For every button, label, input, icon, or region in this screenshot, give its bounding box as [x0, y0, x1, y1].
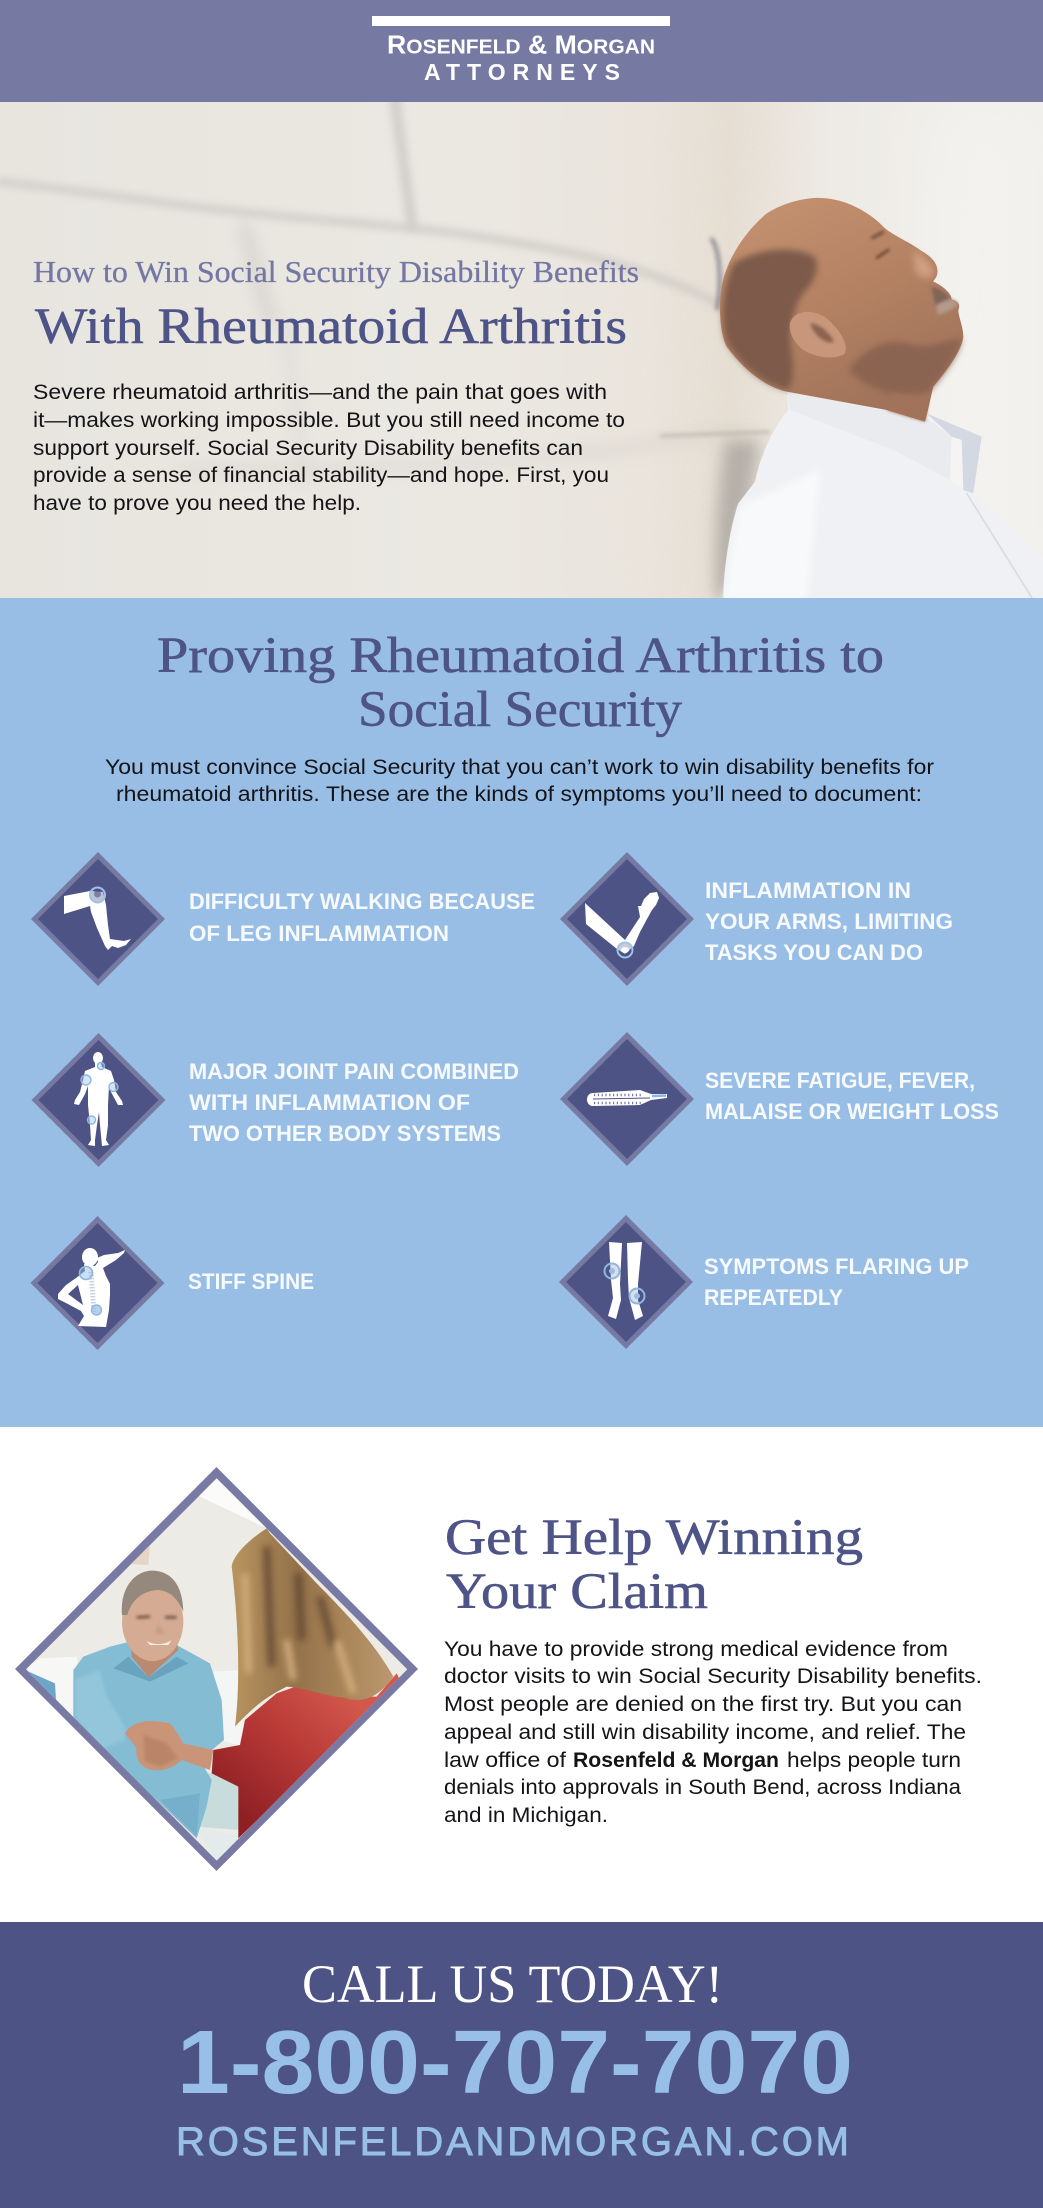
symptom: inflammation in arms: TASKS YOU CAN DO [705, 940, 923, 965]
intro paragraph: have to prove you need the help. [33, 492, 361, 515]
paragraph: medical evidence: Rosenfeld & Morgan [573, 1749, 779, 1772]
subtitle: How to Win: How to Win Social Security Disability Benefits [33, 254, 639, 289]
symptom: major joint pain [189, 1059, 519, 1146]
logo: Rosenfeld & Morgan Attorneys: ROSENFELD & MORGAN [387, 30, 655, 60]
icon: body [32, 1033, 166, 1167]
section intro text: You must convince Social Security that you can’t work to win disability benefits for [105, 756, 934, 779]
icon: arm [560, 852, 694, 986]
paragraph: medical evidence [444, 1638, 982, 1827]
symptom: fatigue [705, 1068, 999, 1124]
symptom: fatigue: SEVERE FATIGUE, FEVER, [705, 1068, 975, 1093]
intro paragraph: it—makes working impossible. But you still need income to [33, 409, 625, 432]
man's shirt [73, 1642, 224, 1838]
symptom: flaring up [704, 1254, 969, 1310]
panel: hero [0, 100, 1043, 600]
paragraph: medical evidence: appeal and still win disability income, and relief. The [444, 1721, 966, 1744]
heading: Proving Rheumatoid Arthritis to Social Security [157, 628, 884, 738]
intro paragraph: provide a sense of financial stability—and hope. First, you [33, 464, 609, 487]
panel: call to action [0, 1922, 1043, 2208]
clasped hands [125, 1721, 213, 1770]
man's head [720, 198, 963, 422]
symptom: inflammation in arms [705, 878, 953, 965]
paragraph: medical evidence: Most people are denied on the first try. But you can [444, 1693, 962, 1716]
intro paragraph: support yourself. Social Security Disability benefits can [33, 437, 583, 460]
logo: Rosenfeld & Morgan Attorneys [372, 16, 670, 85]
symptom: stiff spine: STIFF SPINE [188, 1269, 314, 1294]
icon: spine [30, 1216, 164, 1350]
symptom: difficulty walking: DIFFICULTY WALKING BECAUSE [189, 889, 535, 914]
symptom: major joint pain: TWO OTHER BODY SYSTEMS [189, 1121, 501, 1146]
blurred stone wall [0, 100, 1043, 598]
panel: proving symptoms [0, 598, 1043, 1427]
panel: get help [15, 1467, 980, 1871]
icon: thermometer [560, 1032, 694, 1166]
symptom: flaring up: REPEATEDLY [704, 1285, 843, 1310]
paragraph: medical evidence: and in Michigan. [444, 1804, 608, 1827]
paragraph: medical evidence: You have to provide strong medical evidence from [444, 1638, 948, 1661]
heading: Get Help Winning Your Claim: Your Claim [446, 1564, 708, 1620]
man's head [131, 1644, 178, 1678]
paragraph: medical evidence: denials into approvals in South Bend, across Indiana [444, 1776, 961, 1799]
symptom: flaring up: SYMPTOMS FLARING UP [704, 1254, 969, 1279]
title: With Rheumatoid Arthritis: With Rheumatoid Arthritis [35, 299, 627, 355]
symptom: inflammation in arms: INFLAMMATION IN [705, 878, 911, 903]
heading: Get Help Winning Your Claim [445, 1510, 863, 1620]
symptom: fatigue: MALAISE OR WEIGHT LOSS [705, 1099, 999, 1124]
website: ROSENFELDANDMORGAN.COM [176, 2120, 849, 2164]
section intro text: rheumatoid arthritis. These are the kinds of symptoms you’ll need to document: [116, 783, 922, 806]
heading: Proving Rheumatoid Arthritis to Social Security: Proving Rheumatoid Arthritis to [157, 628, 884, 684]
heading: Get Help Winning Your Claim: Get Help Winning [445, 1510, 863, 1566]
symptom: major joint pain: MAJOR JOINT PAIN COMBINED [189, 1059, 519, 1084]
icon: legs [559, 1215, 693, 1349]
section intro text [105, 756, 934, 806]
panel: header [0, 0, 1043, 102]
photo: man leaning against wall [720, 198, 1043, 600]
phone number: 1-800-707-7070 [177, 2013, 853, 2113]
symptom: difficulty walking: OF LEG INFLAMMATION [189, 921, 449, 946]
intro paragraph: Severe rheumatoid arthritis—and the pain that goes with [33, 381, 607, 404]
intro paragraph [33, 381, 625, 515]
symptom: major joint pain: WITH INFLAMMATION OF [189, 1090, 470, 1115]
paragraph: medical evidence: law office of [444, 1749, 566, 1772]
woman's hair [232, 1528, 393, 1727]
paragraph: medical evidence: doctor visits to win Social Security Disability benefits. [444, 1665, 982, 1688]
photo: handshake in diamond frame [15, 1467, 418, 1871]
woman's red top [212, 1673, 400, 1838]
call us today: CALL US TODAY! [302, 1954, 723, 2014]
paragraph: medical evidence: helps people turn [787, 1749, 961, 1772]
logo: Rosenfeld & Morgan Attorneys: ATTORNEYS [424, 59, 620, 85]
icon: leg [31, 852, 165, 986]
heading: Proving Rheumatoid Arthritis to Social Security: Social Security [358, 682, 683, 738]
man's ear [790, 312, 846, 357]
symptom: inflammation in arms: YOUR ARMS, LIMITING [705, 909, 953, 934]
symptom: difficulty walking [189, 889, 535, 946]
